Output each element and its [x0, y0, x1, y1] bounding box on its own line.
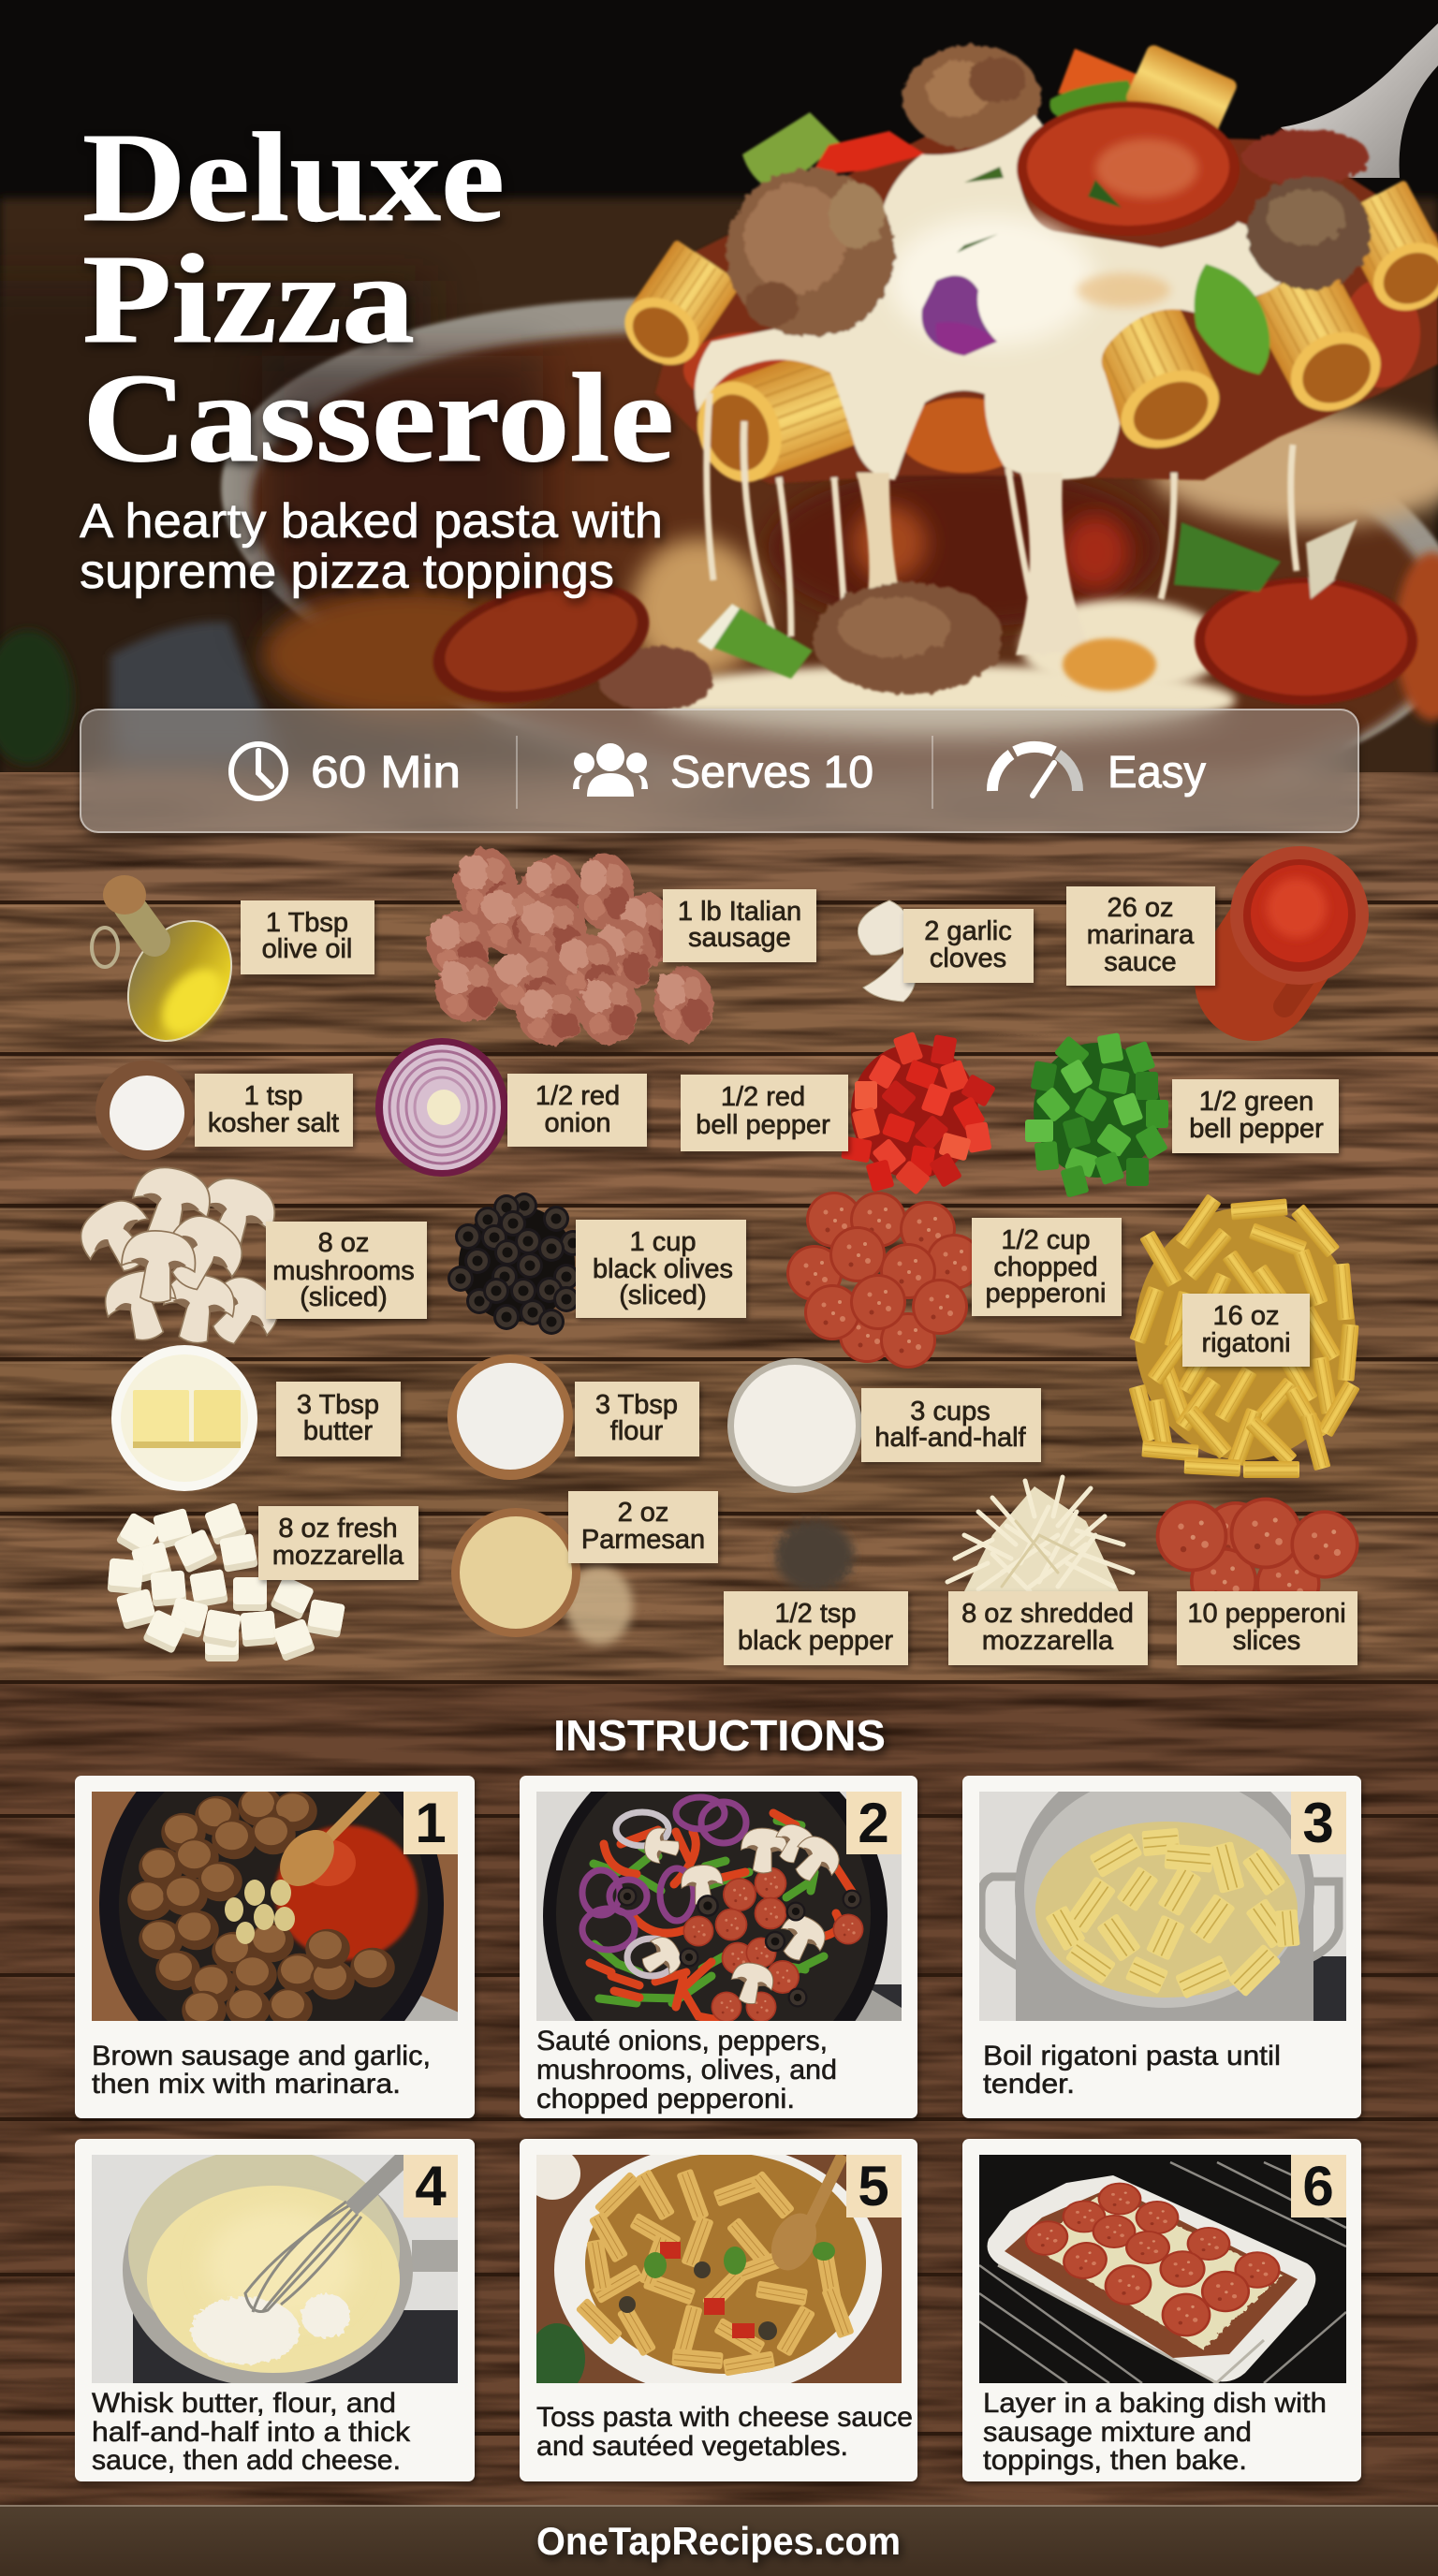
- serving spatula handle: [1281, 23, 1438, 178]
- label: olive oil: [241, 900, 374, 974]
- lower pepper pieces: [697, 604, 813, 679]
- footer band: [0, 2505, 1438, 2576]
- icon: chopped green pepper: [1025, 1032, 1168, 1198]
- label: marinara: [1066, 886, 1215, 986]
- subtitle: A hearty baked pasta with: [80, 494, 663, 549]
- label: black pepper: 1/2 tsp: [774, 1599, 857, 1629]
- step 5 number: 5: [858, 2155, 889, 2217]
- step 4 number: 4: [415, 2155, 447, 2217]
- label: green bell pepper: [1172, 1079, 1339, 1153]
- icon: chopped red pepper: [841, 1032, 996, 1195]
- label: marinara: sauce: [1104, 947, 1177, 977]
- label: butter: butter: [303, 1416, 373, 1446]
- label: black olives: [576, 1220, 746, 1318]
- step 5 card: [520, 2139, 917, 2481]
- baking dish: [987, 2175, 1315, 2381]
- step 2 text: mushrooms, olives, and: [536, 2055, 837, 2086]
- label: garlic: [903, 909, 1034, 983]
- step 6 photo: [979, 2155, 1346, 2383]
- label: black olives: 1 cup: [630, 1227, 696, 1257]
- label: rigatoni: 16 oz: [1213, 1301, 1279, 1331]
- label: red bell pepper: bell pepper: [696, 1110, 830, 1140]
- top sausage: [902, 45, 1370, 185]
- label: rigatoni: rigatoni: [1201, 1328, 1291, 1358]
- green pepper centre: [1195, 264, 1269, 374]
- icon: sausage pile: [427, 848, 712, 1045]
- food on spatula: [420, 43, 1438, 724]
- label: sausage: [663, 889, 816, 962]
- label: flour: flour: [610, 1416, 664, 1446]
- icon: red onion: [375, 1038, 508, 1177]
- label: parmesan: [568, 1491, 718, 1563]
- title: Pizza: [82, 229, 415, 370]
- melted cheese: [695, 115, 1294, 480]
- step 6 text: sausage mixture and: [983, 2417, 1252, 2448]
- subtitle: supreme pizza toppings: [80, 545, 614, 599]
- casserole dish: [218, 296, 1438, 779]
- label: red bell pepper: 1/2 red: [721, 1082, 805, 1112]
- label: sausage: sausage: [688, 923, 791, 953]
- step 2 text: Sauté onions, peppers,: [536, 2026, 828, 2056]
- icon: garlic: [858, 900, 917, 1002]
- label: chopped pepperoni: chopped: [993, 1252, 1098, 1282]
- title: Deluxe: [82, 108, 505, 248]
- icon: pepperoni slices: [1156, 1498, 1359, 1616]
- label: flour: 3 Tbsp: [595, 1390, 678, 1420]
- label: black pepper: black pepper: [738, 1626, 893, 1656]
- label: red onion: [507, 1074, 647, 1147]
- top pepperoni: [1017, 101, 1240, 236]
- icon: people: [573, 743, 648, 797]
- label: mushrooms: 8 oz: [318, 1228, 369, 1258]
- step 3 card: [962, 1750, 1361, 2118]
- step 1 card: [75, 1722, 475, 2118]
- label: butter: [276, 1382, 401, 1456]
- label: garlic: 2 garlic: [924, 916, 1012, 946]
- red onion: [922, 275, 997, 356]
- step 6 number: 6: [1302, 2155, 1334, 2217]
- step 3 text: tender.: [983, 2069, 1075, 2100]
- blurred leaf: [0, 630, 73, 765]
- label: green bell pepper: 1/2 green: [1199, 1087, 1313, 1117]
- icon: rigatoni pile: [1129, 1193, 1360, 1478]
- icon: clock: [231, 744, 286, 798]
- step 6 card: [962, 2139, 1361, 2481]
- label: chopped pepperoni: 1/2 cup: [1001, 1225, 1091, 1255]
- label: red onion: onion: [545, 1108, 610, 1138]
- step 6 text: Layer in a baking dish with: [983, 2388, 1327, 2419]
- peppers at top: [1058, 49, 1150, 94]
- step 2 photo: [536, 1736, 902, 2096]
- label: salt: [195, 1074, 353, 1147]
- label: marinara: 26 oz: [1108, 893, 1173, 923]
- label: fresh mozzarella: mozzarella: [272, 1541, 404, 1571]
- step 5 photo: [524, 2144, 902, 2396]
- difficulty value: Easy: [1108, 748, 1206, 798]
- label: chopped pepperoni: pepperoni: [985, 1279, 1107, 1309]
- icon: marinara jar: [1230, 846, 1369, 1006]
- label: rigatoni: [1182, 1294, 1310, 1367]
- step 3 text: Boil rigatoni pasta until: [983, 2041, 1281, 2071]
- label: olive oil: olive oil: [262, 934, 352, 964]
- label: pepperoni slices: 10 pepperoni: [1187, 1599, 1346, 1629]
- heading: instructions: INSTRUCTIONS: [553, 1711, 886, 1760]
- label: shredded mozzarella: [948, 1591, 1148, 1665]
- label: pepperoni slices: slices: [1233, 1626, 1300, 1656]
- label: shredded mozzarella: mozzarella: [982, 1626, 1114, 1656]
- step 4 text: sauce, then add cheese.: [92, 2445, 401, 2476]
- step 4 text: Whisk butter, flour, and: [92, 2388, 396, 2419]
- bottom sausage: [597, 582, 1004, 711]
- time value: 60 Min: [311, 748, 461, 798]
- label: half-and-half: [861, 1388, 1041, 1462]
- icon: mozzarella cubes: [107, 1502, 345, 1661]
- footer site name: OneTapRecipes.com: [536, 2519, 901, 2563]
- label: chopped pepperoni: [972, 1218, 1122, 1316]
- label: butter: 3 Tbsp: [297, 1390, 379, 1420]
- label: marinara: marinara: [1087, 920, 1195, 950]
- right sausage: [1247, 177, 1371, 289]
- label: sausage: 1 lb Italian: [678, 897, 801, 927]
- icon: difficulty gauge: [992, 747, 1078, 796]
- step 3 number: 3: [1302, 1792, 1334, 1854]
- label: black pepper: [724, 1591, 908, 1665]
- icon: chopped pepperoni: [786, 1192, 982, 1368]
- label: black olives: (sliced): [619, 1281, 707, 1310]
- icon: salt bowl: [95, 1061, 195, 1160]
- icon: butter plate: [111, 1345, 257, 1491]
- label: fresh mozzarella: [258, 1506, 418, 1580]
- icon: black pepper: [775, 1520, 854, 1591]
- title: [82, 108, 674, 489]
- bottom pepperoni left: [420, 561, 662, 724]
- ingredients: [69, 846, 1369, 1665]
- label: mushrooms: (sliced): [300, 1282, 388, 1312]
- step 6 text: toppings, then bake.: [983, 2445, 1247, 2476]
- icon: half-and-half glass: [727, 1358, 862, 1493]
- icon: black olives: [448, 1193, 586, 1335]
- step 3 photo: [979, 1750, 1346, 2031]
- label: half-and-half: 3 cups: [910, 1397, 990, 1427]
- icon: sliced mushrooms: [69, 1160, 289, 1359]
- subtitle: [80, 494, 663, 599]
- label: parmesan: Parmesan: [581, 1525, 705, 1555]
- label: red onion: 1/2 red: [536, 1081, 620, 1111]
- left sausage: [726, 168, 895, 337]
- label: green bell pepper: bell pepper: [1189, 1114, 1324, 1144]
- label: parmesan: 2 oz: [618, 1498, 668, 1528]
- wood table background: [0, 772, 1438, 2576]
- step 6 text: [983, 2388, 1327, 2476]
- label: olive oil: 1 Tbsp: [266, 908, 348, 938]
- servings value: Serves 10: [670, 748, 873, 798]
- step 5 text: [536, 2402, 913, 2462]
- cheese strands: [707, 393, 1297, 655]
- label: pepperoni slices: [1177, 1591, 1357, 1665]
- label: shredded mozzarella: 8 oz shredded: [961, 1599, 1134, 1629]
- rigatoni tubes: [612, 239, 741, 378]
- step 2 text: [536, 2026, 837, 2115]
- label: half-and-half: half-and-half: [874, 1423, 1027, 1453]
- label: red bell pepper: [681, 1075, 848, 1151]
- step 5 text: Toss pasta with cheese sauce: [536, 2402, 913, 2433]
- step 1 text: Brown sausage and garlic,: [92, 2041, 431, 2071]
- step 1 text: then mix with marinara.: [92, 2069, 401, 2100]
- icon: parmesan bowl: [451, 1508, 633, 1645]
- step 3 text: [983, 2041, 1281, 2100]
- label: flour: [575, 1382, 699, 1456]
- label: mushrooms: [266, 1222, 427, 1319]
- step 4 text: [92, 2388, 411, 2476]
- step 5 text: and sautéed vegetables.: [536, 2431, 848, 2462]
- label: fresh mozzarella: 8 oz fresh: [278, 1514, 398, 1544]
- label: mushrooms: mushrooms: [272, 1256, 415, 1286]
- step 4 text: half-and-half into a thick: [92, 2417, 411, 2448]
- label: salt: kosher salt: [208, 1108, 339, 1138]
- step 1 number: 1: [415, 1792, 447, 1854]
- label: salt: 1 tsp: [244, 1081, 302, 1111]
- icon: olive oil bottle: [92, 875, 252, 1060]
- label: black olives: black olives: [593, 1254, 733, 1284]
- bottom pepperoni right: [1195, 578, 1417, 705]
- title: Casserole: [82, 348, 674, 489]
- step 2 number: 2: [858, 1792, 889, 1854]
- step 2 text: chopped pepperoni.: [536, 2084, 795, 2115]
- step 2 card: [520, 1736, 917, 2118]
- step 4 photo: [92, 2148, 459, 2387]
- grey towel: [110, 622, 281, 763]
- step 1 photo: [92, 1722, 459, 2087]
- label: garlic: cloves: [930, 944, 1006, 973]
- icon: shredded mozzarella: [947, 1477, 1133, 1591]
- hero photo: casserole lift: [0, 0, 1438, 781]
- step 1 text: [92, 2041, 431, 2100]
- step 4 card: [75, 2139, 475, 2481]
- stats bar: [80, 709, 1359, 833]
- icon: flour bowl: [448, 1354, 573, 1480]
